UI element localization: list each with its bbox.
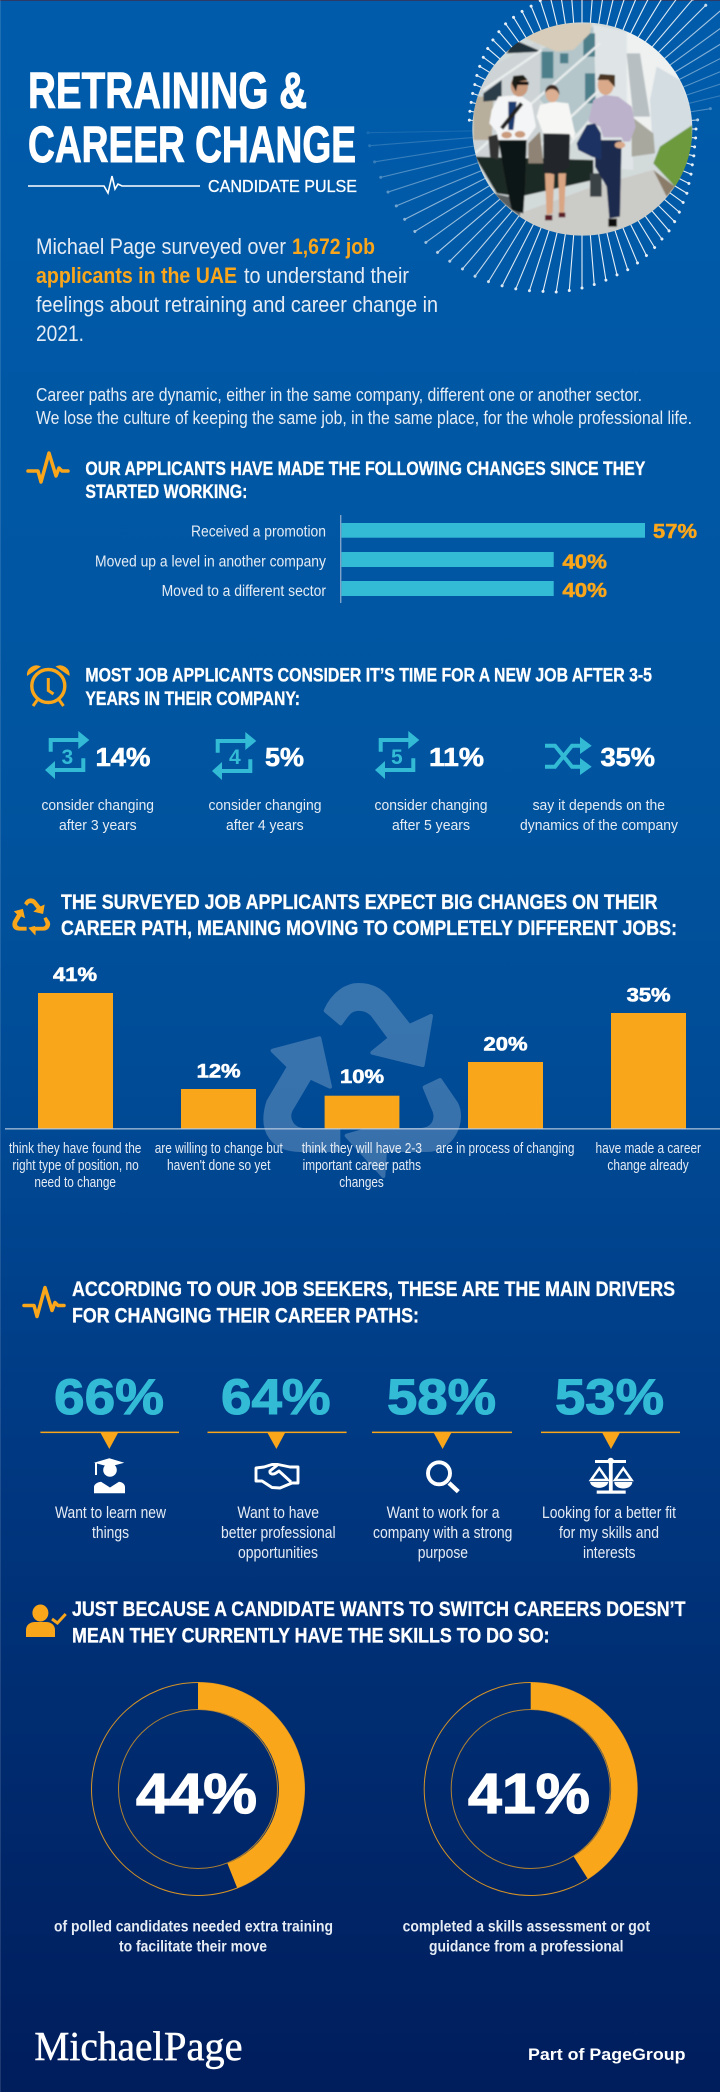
heading: STARTED WORKING: <box>85 482 247 503</box>
heading: MEAN THEY CURRENTLY HAVE THE SKILLS TO DO SO: <box>72 1625 550 1648</box>
sunburst rays <box>368 0 720 292</box>
column chart: 35% <box>627 986 671 1007</box>
context paragraph <box>36 385 692 428</box>
driver: learn new things: things <box>92 1524 129 1542</box>
driver: learn new things: Want to learn new <box>55 1504 166 1522</box>
icon: pulse <box>24 1288 64 1316</box>
panel: skills to switch careers <box>26 1598 686 1956</box>
bar chart: 57% <box>653 521 697 543</box>
heading <box>72 1278 675 1328</box>
bar chart <box>95 515 697 603</box>
icon: scales <box>590 1458 632 1494</box>
icon: pulse <box>28 453 68 482</box>
heading <box>85 459 646 503</box>
photo: three colleagues walking <box>470 20 697 240</box>
stat: after 5 years: 5 <box>391 746 403 769</box>
stat: after 4 years: 5% <box>265 742 304 772</box>
driver: strong purpose: company with a strong <box>373 1524 512 1542</box>
candidate pulse subtitle: CANDIDATE PULSE <box>208 176 357 196</box>
donut chart: 41% <box>424 1682 637 1896</box>
title <box>28 62 356 173</box>
driver: better opportunities: better professional <box>221 1524 336 1542</box>
intro text: 1,672 job <box>292 234 375 259</box>
stat: depends on dynamics: say it depends on the <box>533 797 665 814</box>
donut chart: 41%: 41% <box>468 1762 590 1826</box>
watermark recycle icon <box>265 985 459 1176</box>
bar chart: Received a promotion <box>191 524 326 541</box>
caption: 41% <box>403 1919 650 1956</box>
bar chart: 40% <box>562 551 607 573</box>
icon: graduate <box>94 1458 125 1493</box>
column captions: important career paths <box>303 1158 421 1174</box>
icon: handshake <box>256 1464 298 1488</box>
stat: depends on dynamics <box>520 737 678 834</box>
column captions: haven't done so yet <box>167 1158 270 1174</box>
column chart: 41% <box>53 965 97 986</box>
column captions: change already <box>607 1158 689 1174</box>
driver: learn new things <box>40 1369 179 1542</box>
stat: after 4 years: 4 <box>229 746 241 769</box>
heading <box>85 666 652 710</box>
caption: 41%: guidance from a professional <box>429 1939 624 1956</box>
column captions: think they have found the <box>9 1141 141 1157</box>
intro text: 2021. <box>36 321 84 346</box>
footer logo: Page <box>164 2023 242 2069</box>
intro text: applicants in the UAE <box>36 263 237 288</box>
driver: better opportunities <box>208 1369 347 1562</box>
driver: strong purpose: 58% <box>387 1369 496 1425</box>
driver: better fit: 53% <box>555 1369 664 1425</box>
driver: learn new things: 66% <box>54 1369 164 1425</box>
panel: expected big changes <box>5 890 720 1191</box>
column chart: 20% <box>484 1035 528 1056</box>
column chart: 10% <box>340 1067 384 1088</box>
driver: better fit: interests <box>583 1544 636 1562</box>
driver: better opportunities: opportunities <box>238 1544 318 1562</box>
caption: 44%: of polled candidates needed extra training <box>54 1919 333 1936</box>
donut chart: 44%: 44% <box>136 1762 257 1826</box>
stat: depends on dynamics: dynamics of the company <box>520 817 678 834</box>
panel: main drivers <box>24 1278 680 1562</box>
driver: better fit: for my skills and <box>559 1524 659 1542</box>
caption: 41%: completed a skills assessment or got <box>403 1919 650 1936</box>
stat: after 3 years <box>42 731 154 834</box>
icon: person with check <box>26 1604 66 1637</box>
donut chart: 44% <box>92 1682 304 1896</box>
intro text: feelings about retraining and career change in <box>36 292 438 317</box>
heading: YEARS IN THEIR COMPANY: <box>85 689 300 710</box>
column captions: are in process of changing <box>436 1141 574 1157</box>
driver: better fit <box>541 1369 680 1562</box>
stat: after 5 years: after 5 years <box>392 817 470 834</box>
driver: better fit: Looking for a better fit <box>542 1504 676 1522</box>
footer logo <box>34 2023 243 2069</box>
bar chart: 40% <box>562 580 607 602</box>
driver: better opportunities: 64% <box>221 1369 331 1425</box>
stat: after 3 years: 14% <box>96 742 150 772</box>
column chart: 12% <box>197 1062 241 1083</box>
driver: strong purpose: Want to work for a <box>387 1504 500 1522</box>
driver: strong purpose: purpose <box>418 1544 468 1562</box>
panel: changes since they started working <box>28 453 697 603</box>
stat: after 4 years: consider changing <box>208 797 322 814</box>
stat: after 5 years: consider changing <box>374 797 488 814</box>
stat: depends on dynamics: 35% <box>600 742 655 772</box>
stat: after 3 years: 3 <box>62 746 73 769</box>
stat: after 3 years: consider changing <box>42 797 154 814</box>
heading <box>72 1598 686 1648</box>
heading <box>61 890 677 940</box>
stat: after 5 years: 11% <box>429 742 484 772</box>
candidate pulse subtitle <box>28 176 357 196</box>
footer logo: Michael <box>34 2023 163 2069</box>
column chart <box>5 965 720 1130</box>
context paragraph: Career paths are dynamic, either in the same company, different one or another sector. <box>36 385 642 405</box>
column captions: need to change <box>34 1175 116 1191</box>
heading: FOR CHANGING THEIR CAREER PATHS: <box>72 1305 419 1328</box>
driver: better opportunities: Want to have <box>237 1504 319 1522</box>
stat: after 4 years: after 4 years <box>226 817 304 834</box>
column captions: are willing to change but <box>155 1141 283 1157</box>
icon: magnifier <box>428 1462 458 1492</box>
footer tagline: Part of PageGroup <box>528 2045 686 2064</box>
intro text: to understand their <box>244 263 409 288</box>
bar chart: Moved up a level in another company <box>95 554 326 571</box>
intro text <box>36 234 438 346</box>
stat: after 5 years <box>374 731 488 834</box>
bar chart: Moved to a different sector <box>162 583 326 600</box>
title: CAREER CHANGE <box>28 116 356 173</box>
column captions <box>9 1141 701 1191</box>
title: RETRAINING & <box>28 62 307 119</box>
header panel <box>28 0 720 428</box>
caption: 44%: to facilitate their move <box>119 1939 267 1956</box>
icon: recycle <box>12 898 50 936</box>
intro text: Michael Page surveyed over <box>36 234 286 259</box>
stat: after 3 years: after 3 years <box>59 817 137 834</box>
column captions: changes <box>339 1175 384 1191</box>
caption: 44% <box>54 1919 333 1956</box>
stat: after 4 years <box>208 732 322 834</box>
icon: alarm clock <box>27 665 70 706</box>
column captions: think they will have 2-3 <box>302 1141 422 1157</box>
panel: time for a new job <box>27 665 678 834</box>
column captions: right type of position, no <box>12 1158 139 1174</box>
driver: strong purpose <box>372 1369 512 1562</box>
